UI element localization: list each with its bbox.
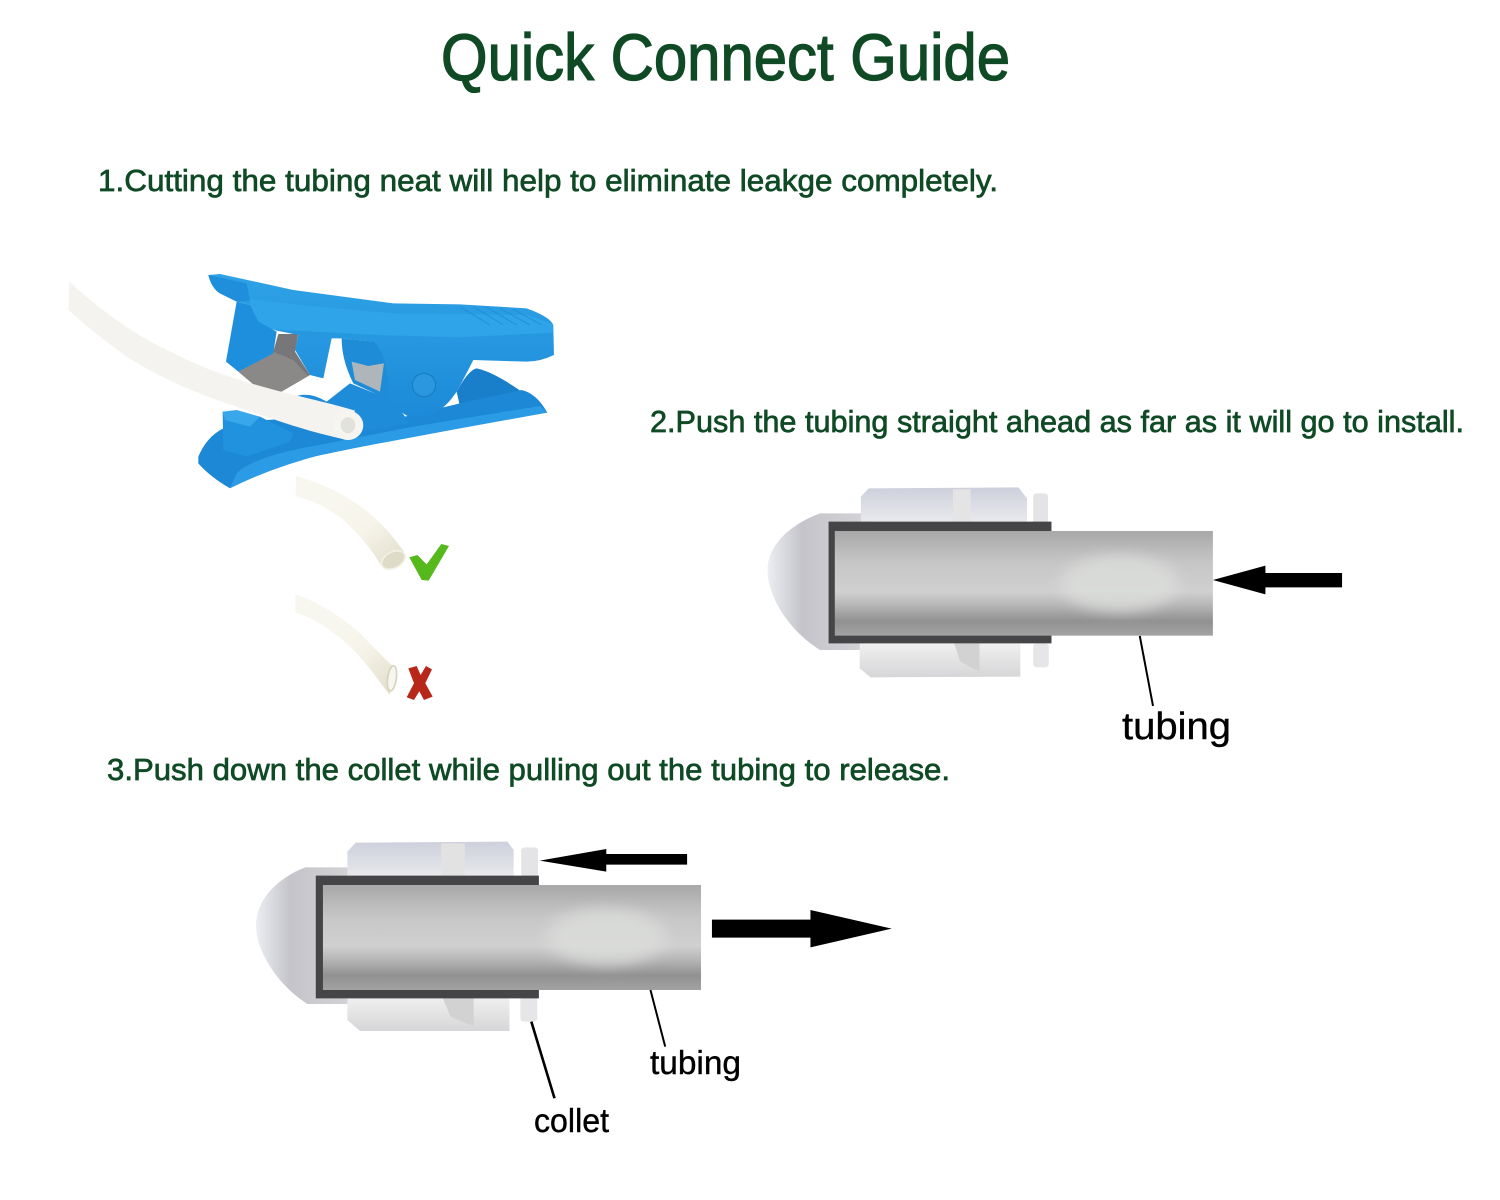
mid jaw fill behind tube (293, 383, 410, 432)
lower cap (860, 643, 1020, 677)
collet tabs (521, 847, 538, 877)
spring (352, 362, 384, 392)
arrow: pull out (712, 910, 892, 947)
tubing (835, 531, 1213, 636)
upper cap (347, 842, 514, 877)
arrow: push collet (540, 849, 687, 872)
diagram: release fitting (256, 842, 892, 1098)
diagram: install fitting (768, 487, 1342, 706)
illustration: tube cutter (68, 274, 554, 488)
tubing label: tubing (1122, 706, 1231, 748)
spring housing (342, 338, 390, 400)
fitting body (256, 867, 354, 1004)
title: Quick Connect Guide (441, 20, 1010, 94)
upper handle (208, 274, 554, 418)
tubing (323, 885, 701, 990)
blade (238, 334, 310, 398)
lower cap (347, 997, 509, 1031)
handle grip ribs (460, 307, 542, 325)
tubing leader line (1140, 636, 1153, 706)
step 2 heading: 2.Push the tubing straight ahead as far as it will go to install. (650, 404, 1464, 439)
step 1 heading: 1.Cutting the tubing neat will help to eliminate leakge completely. (98, 163, 998, 198)
icon: green check mark (409, 544, 449, 581)
dark socket (316, 876, 539, 998)
lower jaw (198, 390, 547, 488)
upper cap (861, 487, 1027, 522)
arrow: push in (1213, 566, 1342, 594)
rear dark spring gap (457, 368, 522, 407)
jaw block (223, 412, 293, 457)
dark socket (829, 522, 1051, 643)
pivot (412, 373, 436, 397)
tubing leader line (650, 990, 665, 1047)
step 3 heading: 3.Push down the collet while pulling out the tubing to release. (107, 752, 950, 787)
illustration: correct straight cut with check (295, 476, 449, 581)
illustration: incorrect angled cut with cross (295, 594, 433, 700)
collet tabs (1033, 493, 1048, 523)
collet leader line (531, 1022, 554, 1098)
collet label: collet (534, 1102, 609, 1139)
blade housing (226, 302, 277, 372)
fitting body (768, 513, 867, 650)
tubing label small: tubing (650, 1044, 741, 1081)
white tube (68, 282, 355, 440)
icon: red cross mark (407, 666, 433, 700)
